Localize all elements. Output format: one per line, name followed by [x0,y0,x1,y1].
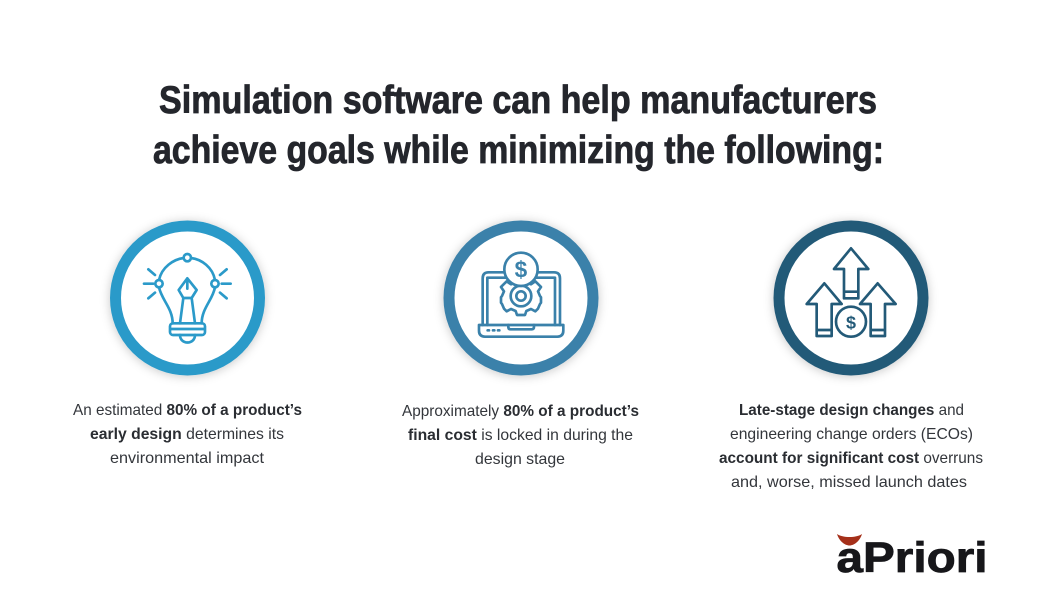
text: late-stage changes: and, worse, missed launch dates [731,474,967,491]
title [153,79,884,172]
text: late-stage changes: Late-stage design changes and [739,402,964,419]
text: environmental impact [73,402,302,467]
icon: laptop with gear and dollar [449,226,593,370]
panel: environmental impact [73,226,302,467]
text: final cost: design stage [475,451,565,468]
title: Simulation software can help manufacturers [159,79,877,122]
icon: light bulb with pen nib [116,226,260,370]
icon: laptop with gear and dollar: $ [515,256,528,282]
text: late-stage changes: account for significant cost overruns [719,450,983,467]
text: late-stage changes [719,402,983,491]
text: final cost [402,403,639,468]
text: late-stage changes: engineering change orders (ECOs) [730,426,973,443]
text: environmental impact: environmental impact [110,450,265,467]
panel: final cost [402,226,639,468]
text: environmental impact: An estimated 80% of a product’s [73,402,302,419]
text: final cost: Approximately 80% of a product’s [402,403,639,420]
text: final cost: final cost is locked in during the [408,427,633,444]
icon: rising arrows with dollar [779,226,923,370]
title: achieve goals while minimizing the following: [153,129,884,172]
icon: rising arrows with dollar: $ [846,312,856,332]
text: environmental impact: early design determines its [90,426,284,443]
panel: late-stage changes [719,226,983,491]
logo: aPriori: aPriori [836,534,988,582]
